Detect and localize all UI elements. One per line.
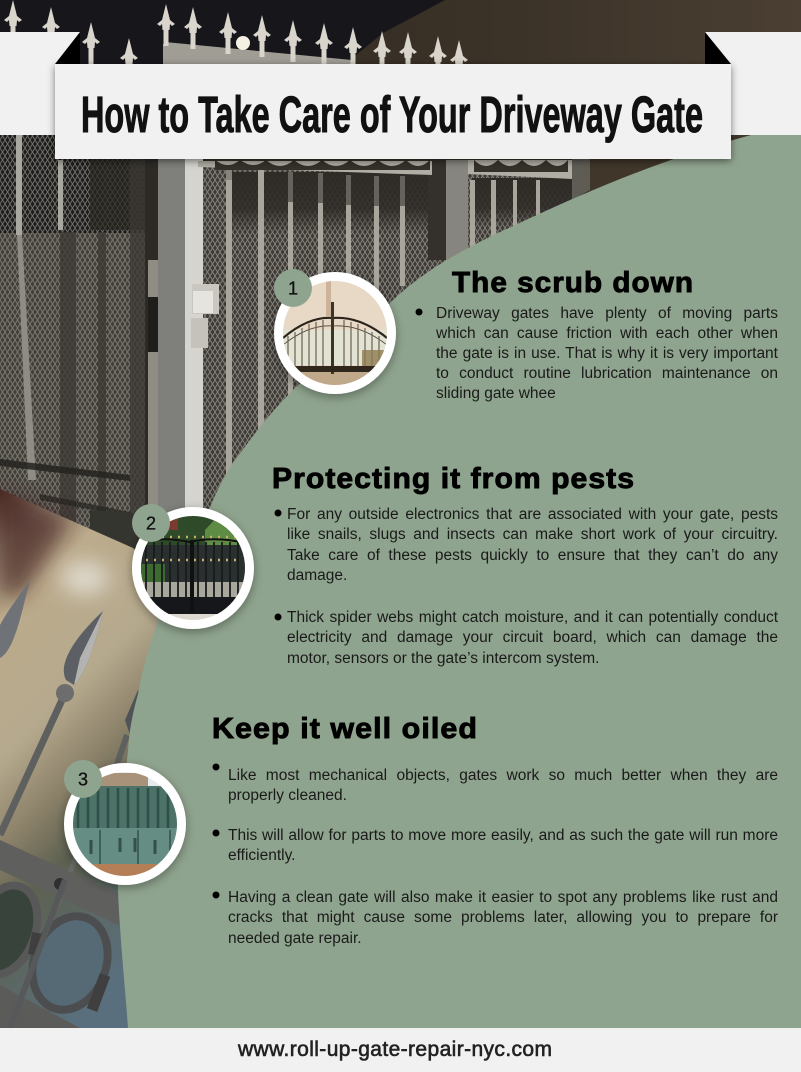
- image 2: dark gate with hedge: [132, 507, 254, 629]
- text: pests paragraph 2: [287, 609, 778, 667]
- text: oiled paragraph 3: needed gate repair.: [228, 930, 362, 947]
- text: pests paragraph 2: electricity and damage your circuit board, which can damage the: [287, 629, 778, 646]
- text: oiled paragraph 1: properly cleaned.: [228, 787, 347, 804]
- photo: gate top with finials: [0, 0, 801, 140]
- text: pests paragraph 1: [287, 506, 778, 584]
- text: scrub down paragraph: sliding gate whee: [436, 385, 556, 402]
- text: oiled paragraph 2: [228, 827, 778, 864]
- text: pests paragraph 1: Take care of these pests quickly to ensure that they can’t do any: [287, 547, 778, 564]
- text: oiled paragraph 3: cracks that might cause some problems later, allowing you to prepare for: [228, 909, 778, 926]
- text: pests paragraph 1: like snails, slugs and insects can make short work of your circuitry.: [287, 526, 778, 543]
- number badge 1: 1: [288, 278, 298, 298]
- text: oiled paragraph 3: Having a clean gate will also make it easier to spot any problems like rust and: [228, 889, 778, 906]
- number badge 3: 3: [78, 770, 88, 790]
- heading: the scrub down: The scrub down: [452, 267, 694, 299]
- bullet markers: [212, 308, 422, 898]
- green curved panel: [118, 135, 801, 1028]
- text: pests paragraph 1: damage.: [287, 567, 347, 584]
- image 3: teal gate: [64, 763, 186, 885]
- text: pests paragraph 2: Thick spider webs might catch moisture, and it can potentially conduct: [287, 609, 778, 626]
- number badge 1: [274, 269, 312, 307]
- text: oiled paragraph 2: efficiently.: [228, 847, 296, 864]
- text: scrub down paragraph: Driveway gates have plenty of moving parts: [436, 305, 778, 322]
- title ribbon: [0, 32, 801, 159]
- footer band: [0, 1028, 801, 1072]
- footer url: www.roll-up-gate-repair-nyc.com: [237, 1038, 552, 1061]
- text: oiled paragraph 2: This will allow for parts to move more easily, and as such the gate will run more: [228, 827, 778, 844]
- text: scrub down paragraph: to conduct routine lubrication maintenance on: [436, 365, 778, 382]
- text: oiled paragraph 3: [228, 889, 778, 947]
- image 1: ornate gate: [274, 272, 396, 394]
- heading: keep it well oiled: Keep it well oiled: [212, 713, 478, 745]
- text: pests paragraph 2: motor, sensors or the gate’s intercom system.: [287, 650, 599, 667]
- text: oiled paragraph 1: Like most mechanical objects, gates work so much better when they are: [228, 767, 778, 784]
- number badge 2: 2: [146, 514, 156, 534]
- heading: protecting it from pests: Protecting it from pests: [272, 463, 635, 495]
- number badge 2: [132, 504, 170, 542]
- number badge 3: [64, 760, 102, 798]
- photo: wrought iron spears: [0, 489, 190, 1028]
- text: pests paragraph 1: For any outside electronics that are associated with your gate, pests: [287, 506, 778, 523]
- text: scrub down paragraph: which can cause friction with each other when: [436, 325, 778, 342]
- text: scrub down paragraph: the gate is in use. That is why it is very important: [436, 345, 778, 362]
- photo: mesh driveway gate: [0, 135, 801, 560]
- text: scrub down paragraph: [436, 305, 778, 402]
- text: oiled paragraph 1: [228, 767, 778, 804]
